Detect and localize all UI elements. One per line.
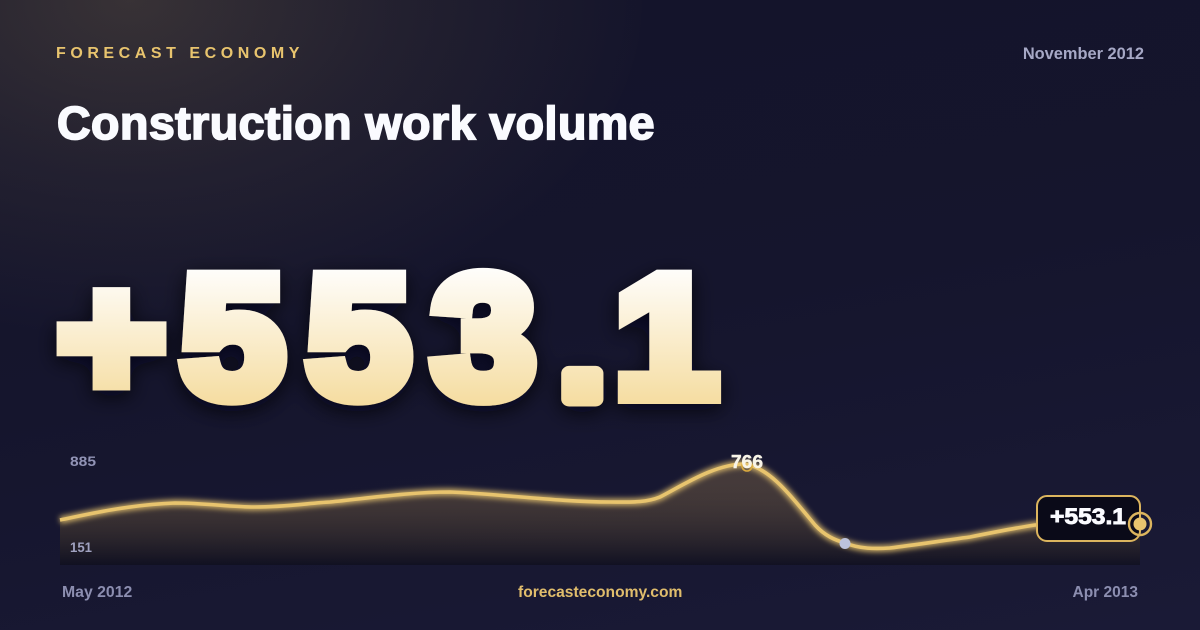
sparkline chart xyxy=(60,452,1151,565)
current value callout: +553.1 xyxy=(1050,504,1126,529)
source url: forecasteconomy.com xyxy=(518,584,682,601)
axis min: 151 xyxy=(70,539,92,555)
peak marker xyxy=(742,461,752,471)
trend line xyxy=(60,464,1140,548)
big number: 1 xyxy=(615,240,718,433)
low marker xyxy=(840,538,850,549)
end date: Apr 2013 xyxy=(1073,584,1138,601)
brand label: FORECAST ECONOMY xyxy=(56,45,304,62)
date label: November 2012 xyxy=(1023,45,1144,63)
big number: +553 xyxy=(57,240,535,433)
end point marker xyxy=(1129,513,1151,535)
peak value: 766 xyxy=(731,452,763,472)
big number: . xyxy=(557,243,608,436)
axis max: 885 xyxy=(70,453,96,469)
start date: May 2012 xyxy=(62,584,132,601)
current value callout xyxy=(1037,496,1140,541)
line glow xyxy=(60,464,1140,548)
area fill xyxy=(60,464,1140,565)
title: Construction work volume xyxy=(57,97,655,149)
